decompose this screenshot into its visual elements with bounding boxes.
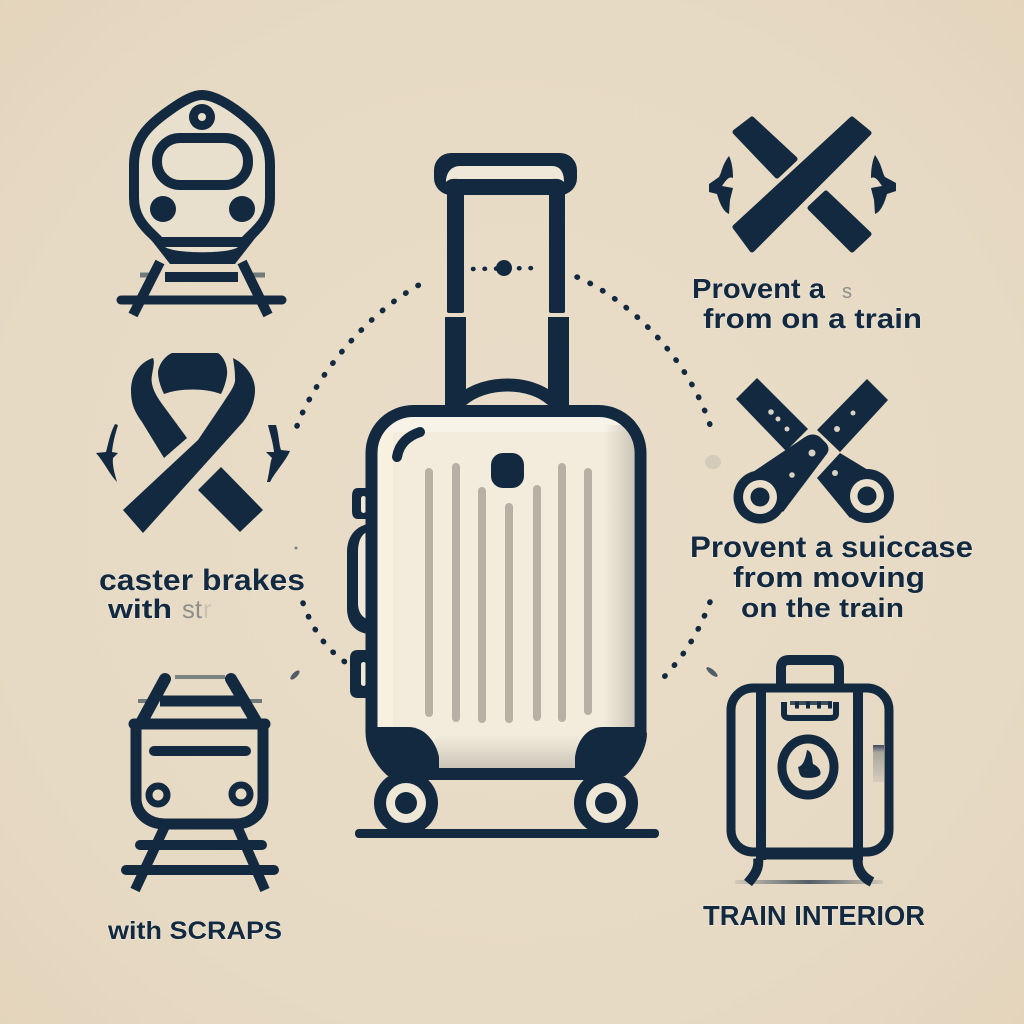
- wheels: [374, 771, 638, 835]
- icon: crossed bars top-right: [709, 119, 896, 250]
- text: caster brakes: r: [203, 594, 212, 624]
- smudges near the dotted circle: [289, 455, 721, 681]
- text: train interior: TRAIN INTERIOR: [703, 900, 925, 931]
- icon: strap ribbon: [96, 353, 290, 533]
- wheel housings: [366, 727, 647, 776]
- text: prevent a suitcase from on a train: [692, 273, 922, 334]
- text: caster brakes: caster brakes: [99, 564, 305, 597]
- dot: top of circle: [496, 260, 512, 276]
- text: with scraps: with SCRAPS: [107, 917, 282, 945]
- icon: train bottom-left: [126, 677, 274, 890]
- text: prevent a suitcase from on a train: from on a train: [703, 303, 922, 334]
- icon: small suitcase: [731, 660, 889, 884]
- text: prevent a suitcase from on a train: s: [842, 281, 852, 303]
- text: prevent a suitcase from moving: on the train: [741, 593, 904, 623]
- text: prevent a suitcase from moving: [690, 531, 973, 623]
- top carry handle: [462, 385, 552, 400]
- icon: scissors crossed straps: [734, 378, 894, 524]
- suitcase body: [372, 411, 640, 774]
- text: prevent a suitcase from moving: from moving: [733, 562, 925, 594]
- telescopic handle: [434, 153, 577, 409]
- ribs: [425, 463, 592, 723]
- text: prevent a suitcase from on a train: Provent a: [692, 273, 825, 304]
- ground line: [355, 829, 659, 838]
- text: prevent a suitcase from moving: Provent a suiccase: [690, 531, 973, 564]
- dotted circle around suitcase: [297, 268, 711, 684]
- highlight corner: [397, 432, 420, 457]
- side handles: [347, 488, 368, 698]
- text: caster brakes: with: [107, 594, 172, 624]
- icon: train front top-left: [121, 95, 282, 315]
- lock: [491, 453, 524, 488]
- text: caster brakes: [99, 564, 305, 624]
- central suitcase: [347, 153, 659, 838]
- text: caster brakes: st: [182, 594, 203, 624]
